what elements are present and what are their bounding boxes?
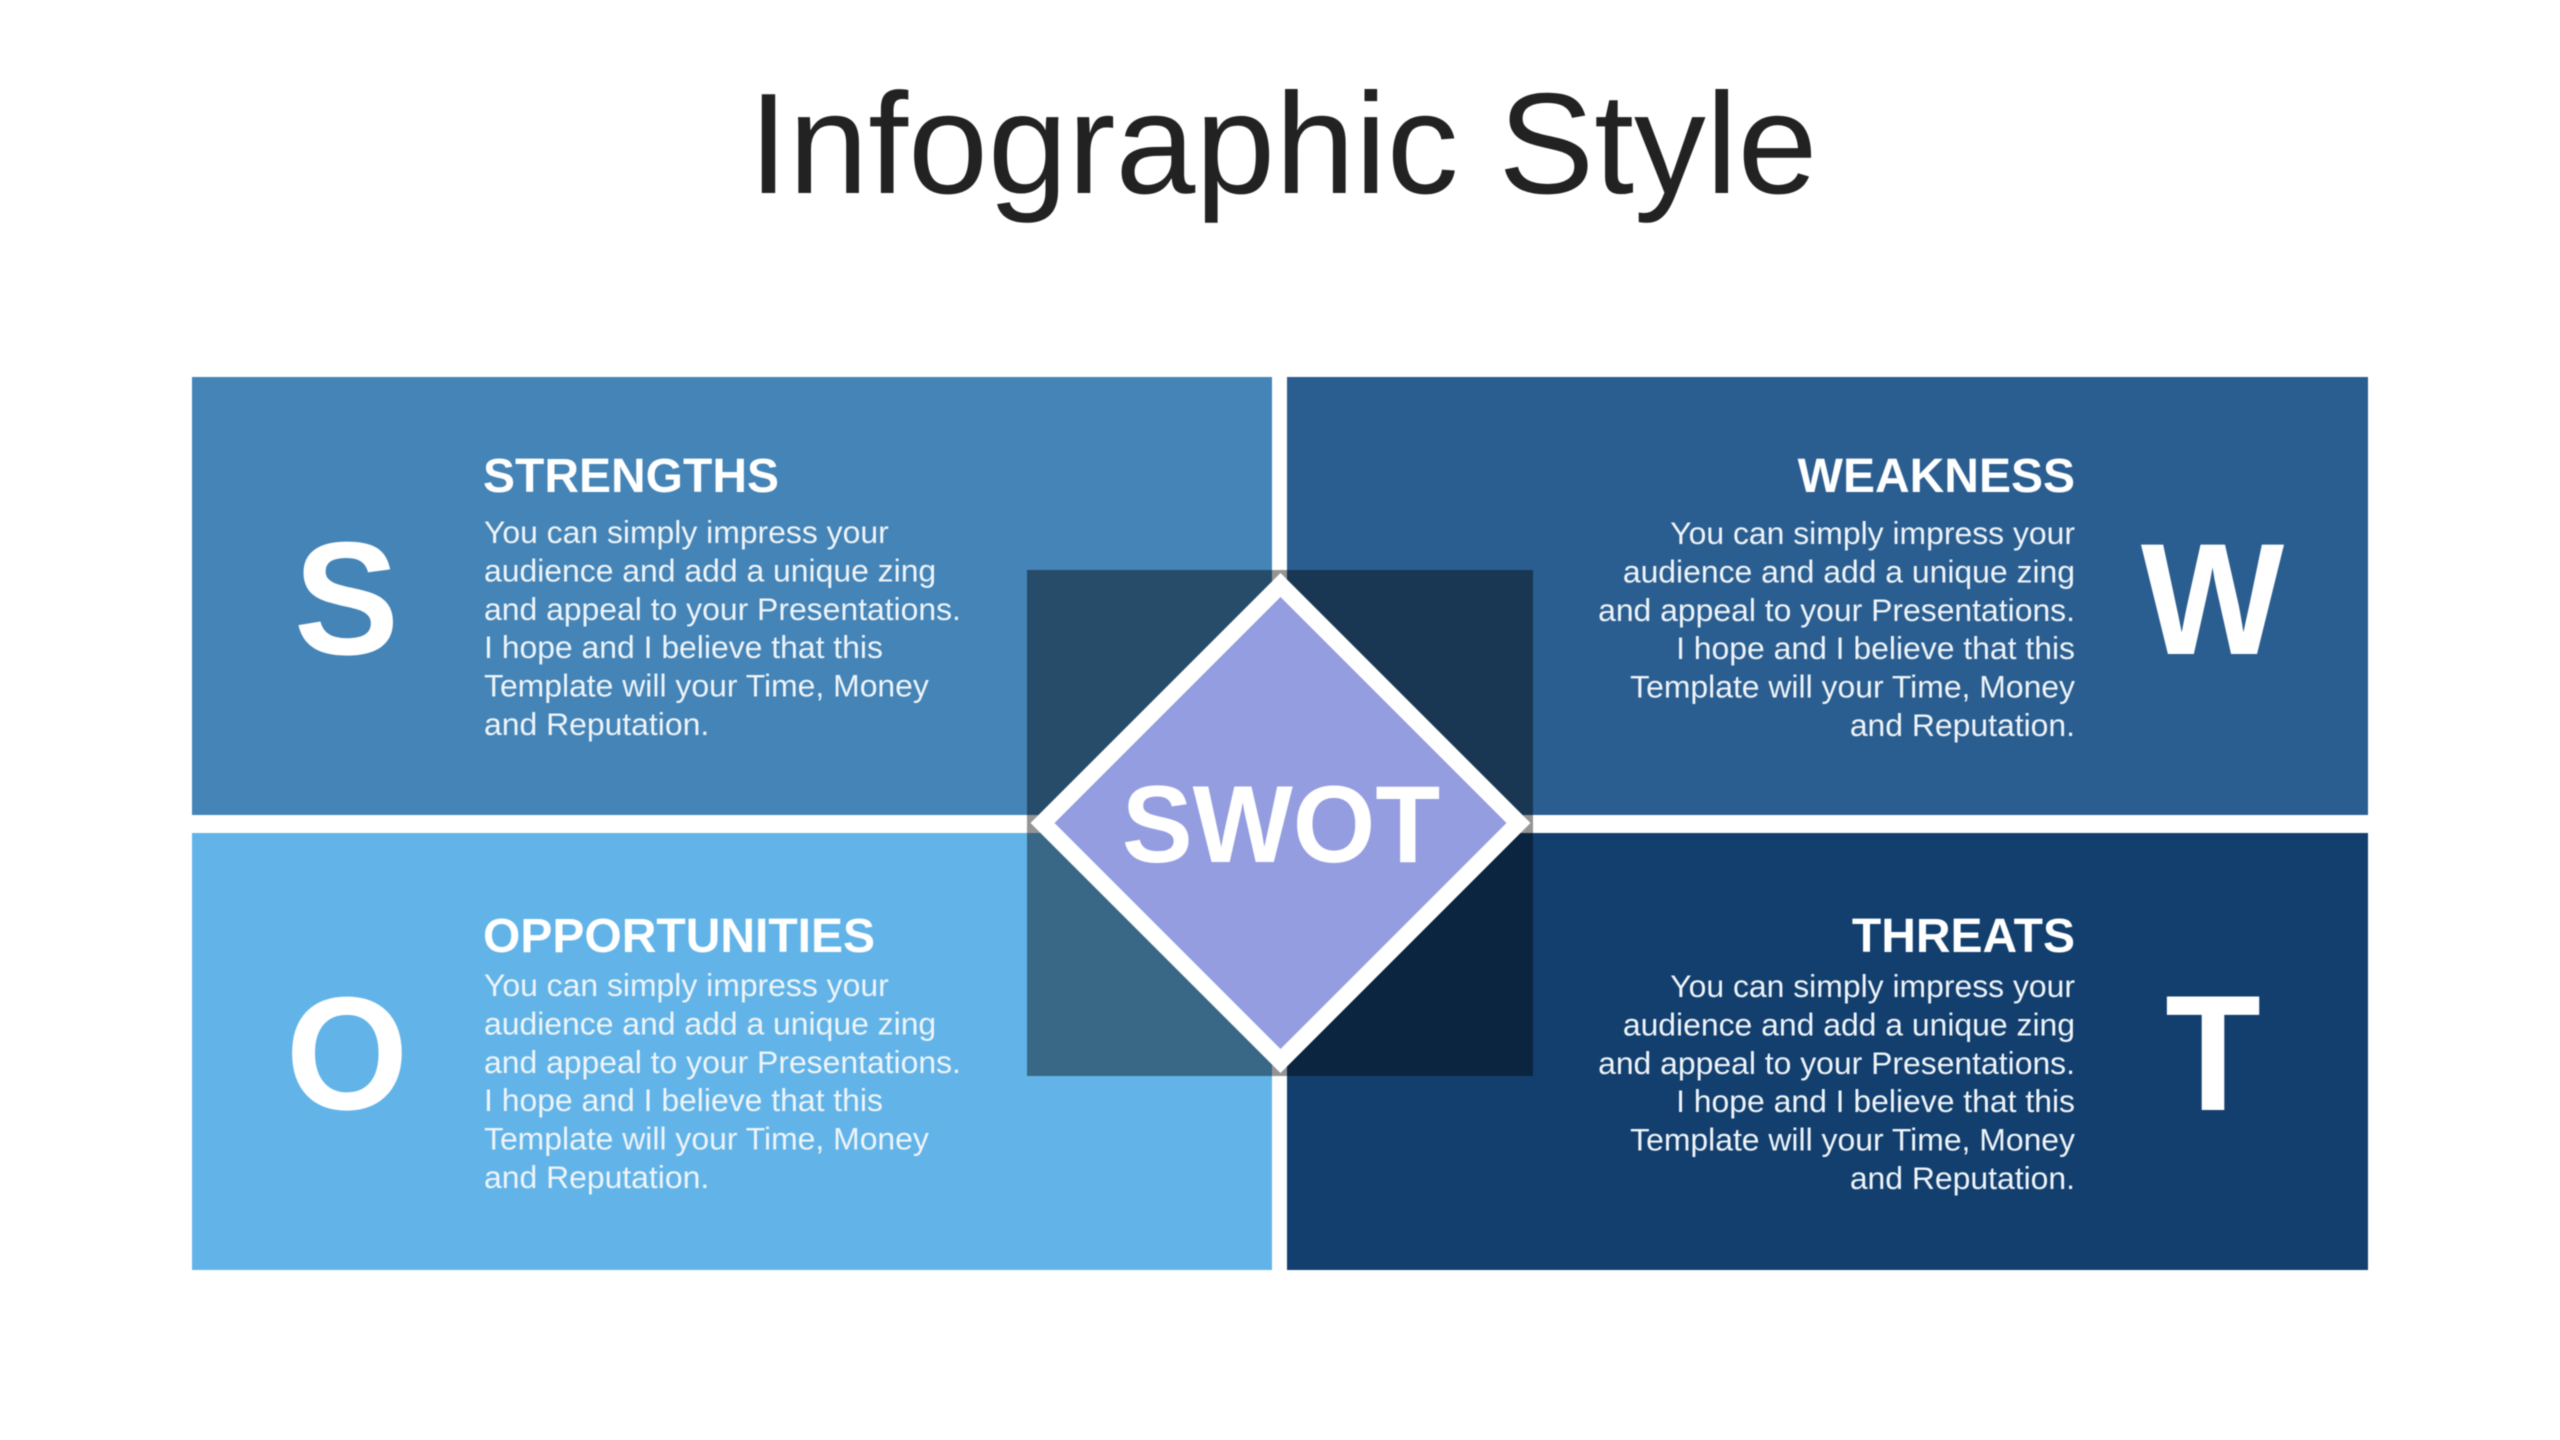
body text: threats: You can simply impress your [1670,968,2075,1004]
body text: strengths: Template will your Time, Money [484,668,929,704]
body text: threats: I hope and I believe that this [1676,1083,2075,1119]
body text: strengths: and appeal to your Presentations. [484,591,961,627]
body text: weakness: I hope and I believe that this [1676,630,2075,666]
panel: opportunities [192,833,1272,1270]
letter O: O [286,964,408,1143]
heading: weakness: WEAKNESS [1798,450,2075,503]
body text: strengths: and Reputation. [484,706,709,742]
body text: weakness: You can simply impress your [1670,515,2075,551]
body text: opportunities [484,967,961,1195]
body text: strengths: I hope and I believe that this [484,629,883,665]
letter W: W [2141,510,2284,688]
panel: strengths [192,377,1272,815]
body text: weakness: Template will your Time, Money [1630,669,2075,705]
body text: threats: audience and add a unique zing [1623,1006,2075,1042]
body text: strengths: audience and add a unique zing [484,552,936,588]
body text: opportunities: I hope and I believe that this [484,1082,883,1118]
panel: weakness [1287,377,2368,815]
body text: strengths [484,514,961,742]
heading: opportunities: OPPORTUNITIES [483,910,875,963]
body text: weakness: and appeal to your Presentations. [1598,592,2075,628]
body text: weakness: audience and add a unique zing [1623,553,2075,589]
letter T: T [2165,961,2261,1146]
title: Infographic Style [749,64,1817,224]
body text: opportunities: You can simply impress your [484,967,889,1003]
body text: opportunities: audience and add a unique zing [484,1005,936,1041]
panel: threats [1287,833,2368,1270]
body text: opportunities: and appeal to your Presentations. [484,1044,961,1080]
body text: opportunities: Template will your Time, Money [484,1121,929,1157]
body text: threats [1598,968,2075,1196]
body text: threats: and Reputation. [1850,1160,2075,1196]
body text: strengths: You can simply impress your [484,514,889,550]
heading: strengths: STRENGTHS [483,450,779,503]
letter S: S [294,509,399,688]
body text: weakness: and Reputation. [1850,707,2075,743]
body text: weakness [1598,515,2075,743]
body text: threats: and appeal to your Presentations. [1598,1045,2075,1081]
center diamond: SWOT: SWOT [1122,762,1440,885]
central translucent square [1027,570,1533,1076]
body text: threats: Template will your Time, Money [1630,1122,2075,1158]
heading: threats: THREATS [1852,910,2075,963]
center diamond: SWOT [1030,573,1530,1073]
body text: opportunities: and Reputation. [484,1159,709,1195]
